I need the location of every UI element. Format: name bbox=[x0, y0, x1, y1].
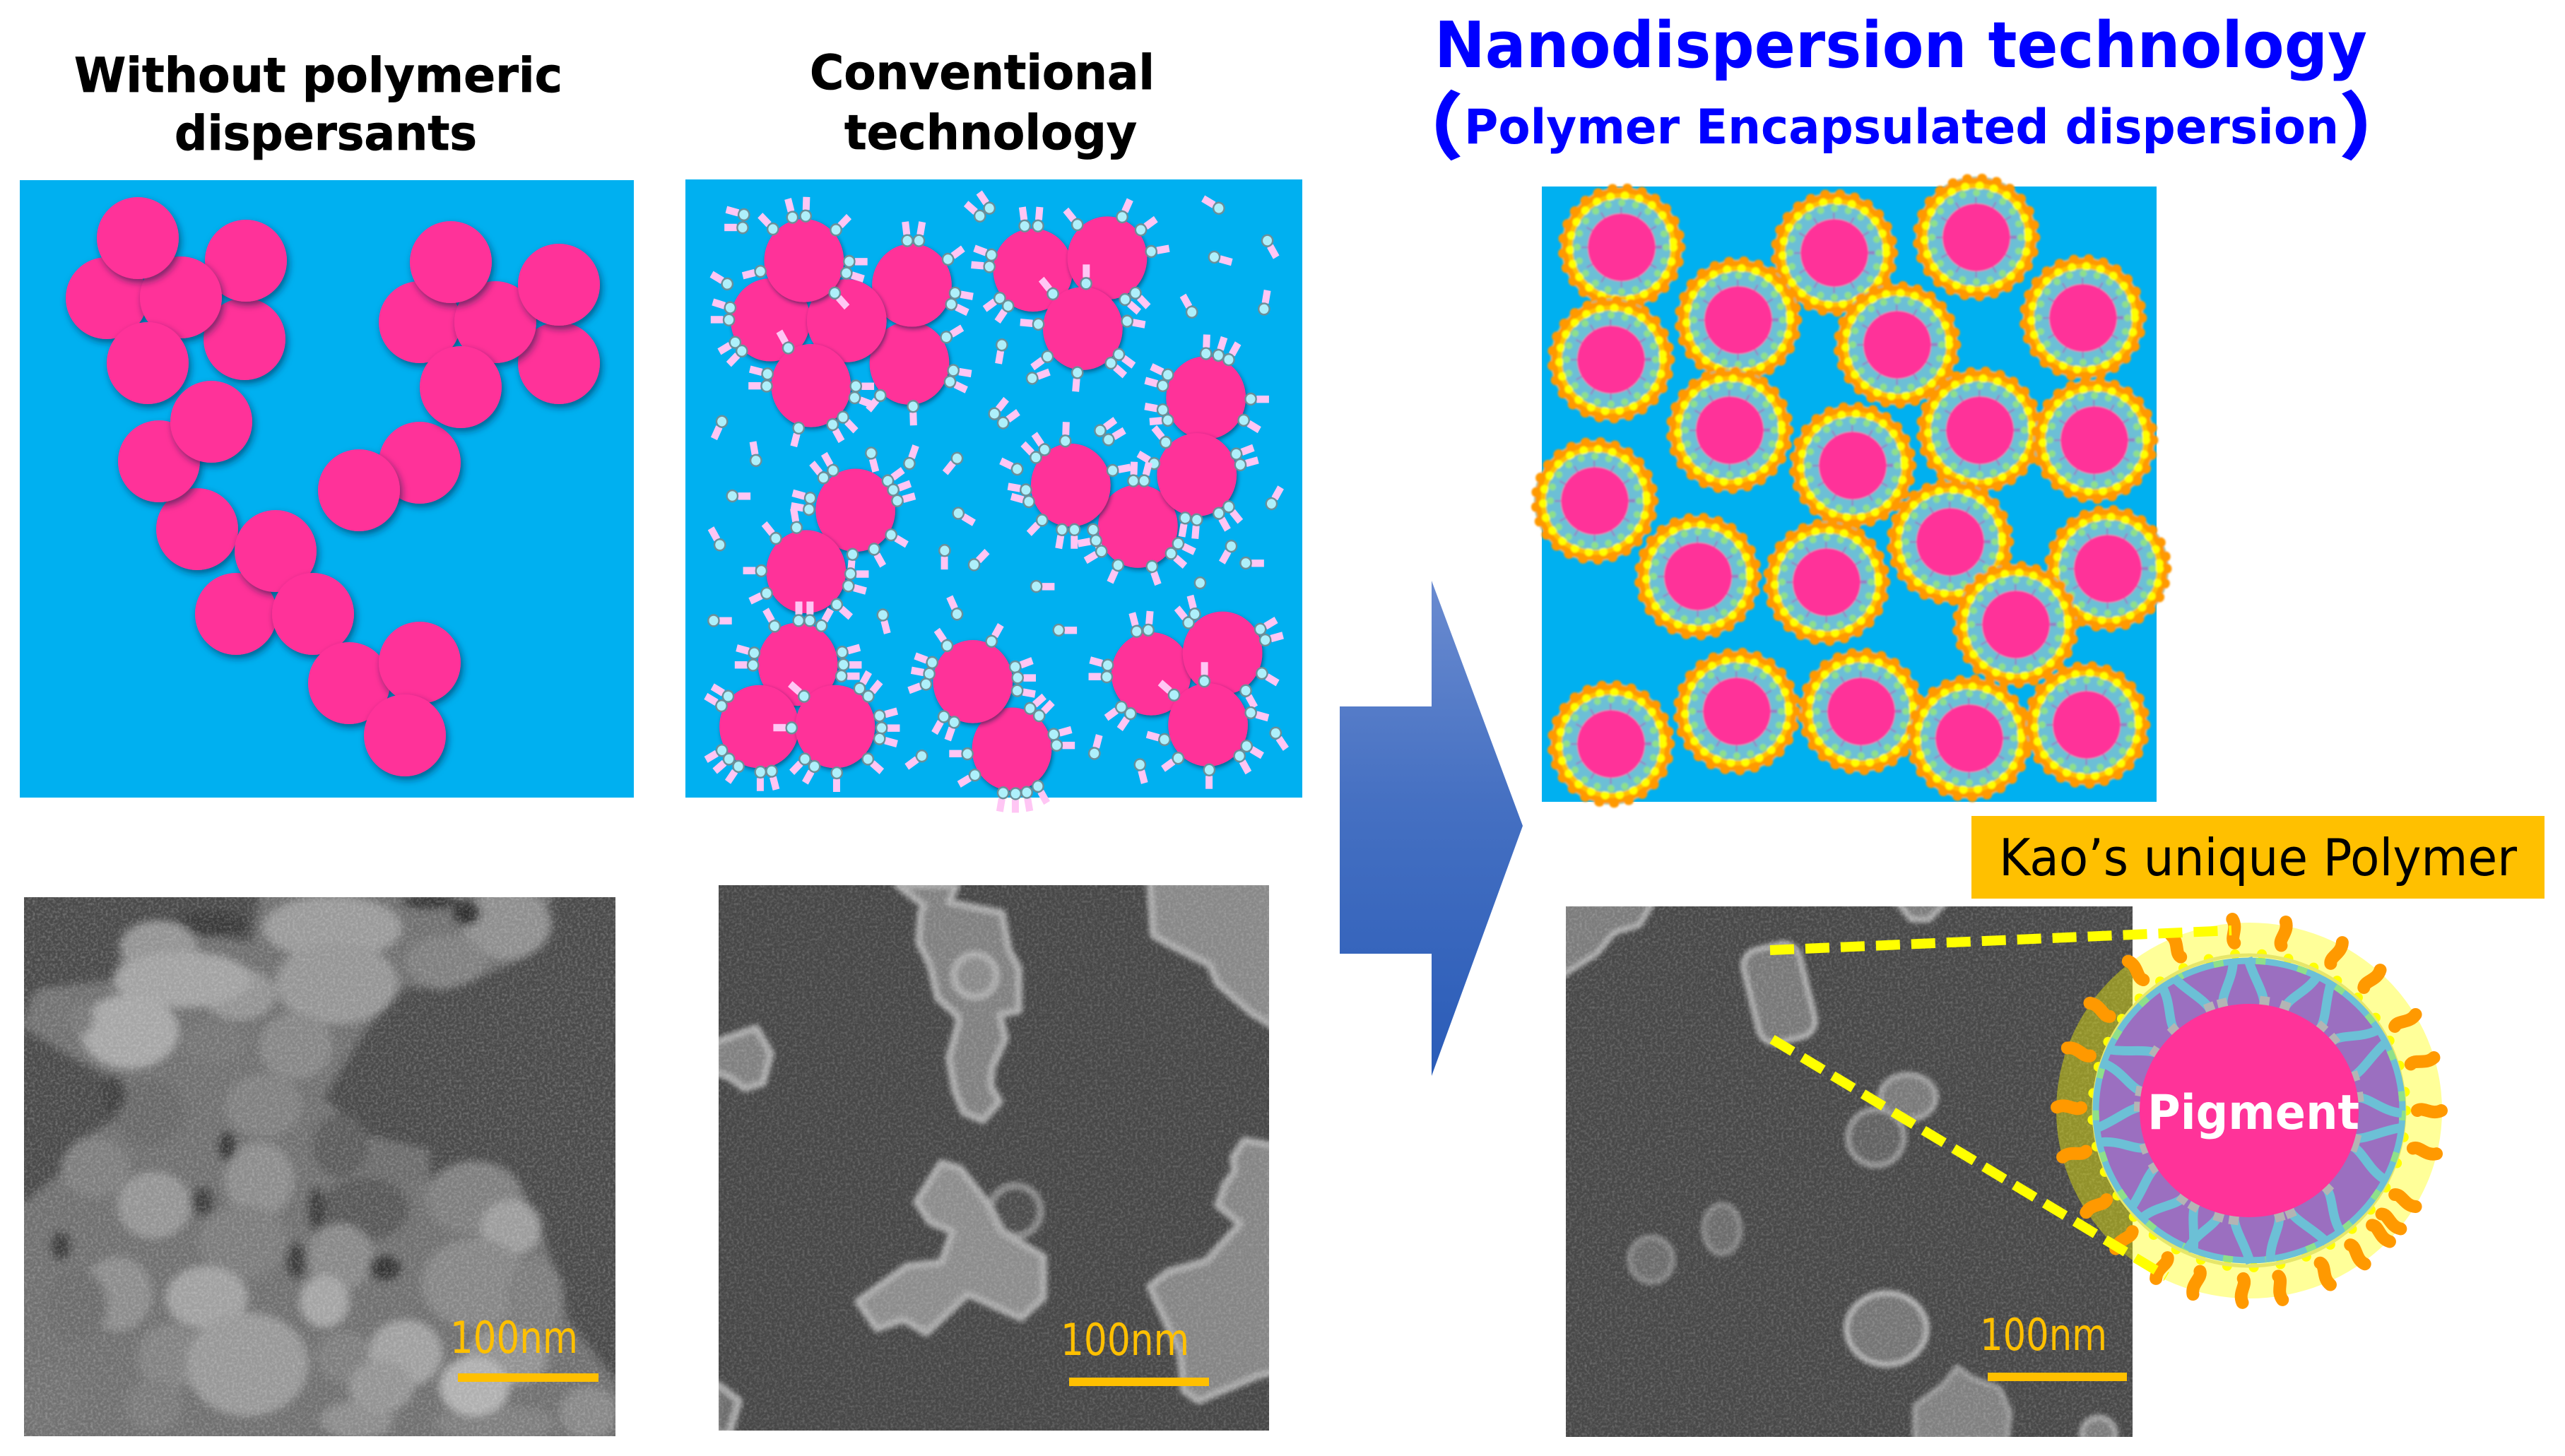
heading: nanodispersion technology bbox=[1391, 8, 2412, 167]
heading: nanodispersion technology: Polymer Encapsulated dispersion bbox=[1464, 100, 2339, 155]
diagram: encapsulated pigment particle bbox=[2056, 919, 2442, 1303]
heading: without polymeric dispersants bbox=[74, 48, 562, 162]
panel: polymer encapsulated particles bbox=[1534, 177, 2169, 805]
heading: nanodispersion technology: ） bbox=[2341, 88, 2412, 167]
callout: kao's unique polymer: Kao’s unique Polymer bbox=[1999, 828, 2517, 887]
heading: conventional technology: Conventional bbox=[810, 45, 1155, 101]
callout: kao's unique polymer bbox=[1971, 816, 2545, 899]
scale bar: third micrograph bbox=[1980, 1309, 2127, 1381]
scale bar: third micrograph: 100nm bbox=[1980, 1309, 2107, 1361]
heading: conventional technology bbox=[810, 45, 1155, 161]
heading: nanodispersion technology: Nanodispersion technology bbox=[1434, 8, 2367, 83]
scale bar: second micrograph: 100nm bbox=[1061, 1314, 1189, 1366]
heading: without polymeric dispersants: dispersants bbox=[175, 106, 477, 162]
heading: without polymeric dispersants: Without polymeric bbox=[74, 48, 562, 104]
panel: conventional dispersant clusters bbox=[685, 179, 1302, 812]
micrograph: aggregated particles without dispersant bbox=[16, 889, 620, 1442]
micrograph: conventional dispersion bbox=[714, 880, 1275, 1434]
heading: conventional technology: technology bbox=[844, 105, 1137, 161]
arrow: from conventional to nanodispersion bbox=[1340, 581, 1523, 1076]
cyan polymer strands bbox=[2097, 958, 2402, 1263]
orange polymer chains bbox=[2057, 919, 2441, 1303]
panel: pigment aggregates without dispersant bbox=[20, 180, 634, 798]
heading: nanodispersion technology: （ bbox=[1391, 88, 1461, 167]
dispersant molecules bbox=[703, 189, 1290, 812]
scale bar: second micrograph bbox=[1061, 1314, 1209, 1386]
label: pigment: Pigment bbox=[2147, 1085, 2359, 1141]
micrograph: nanodispersion bbox=[1558, 901, 2133, 1451]
scale bar: first micrograph: 100nm bbox=[450, 1312, 578, 1363]
zoom callout lines bbox=[1770, 930, 2231, 1277]
